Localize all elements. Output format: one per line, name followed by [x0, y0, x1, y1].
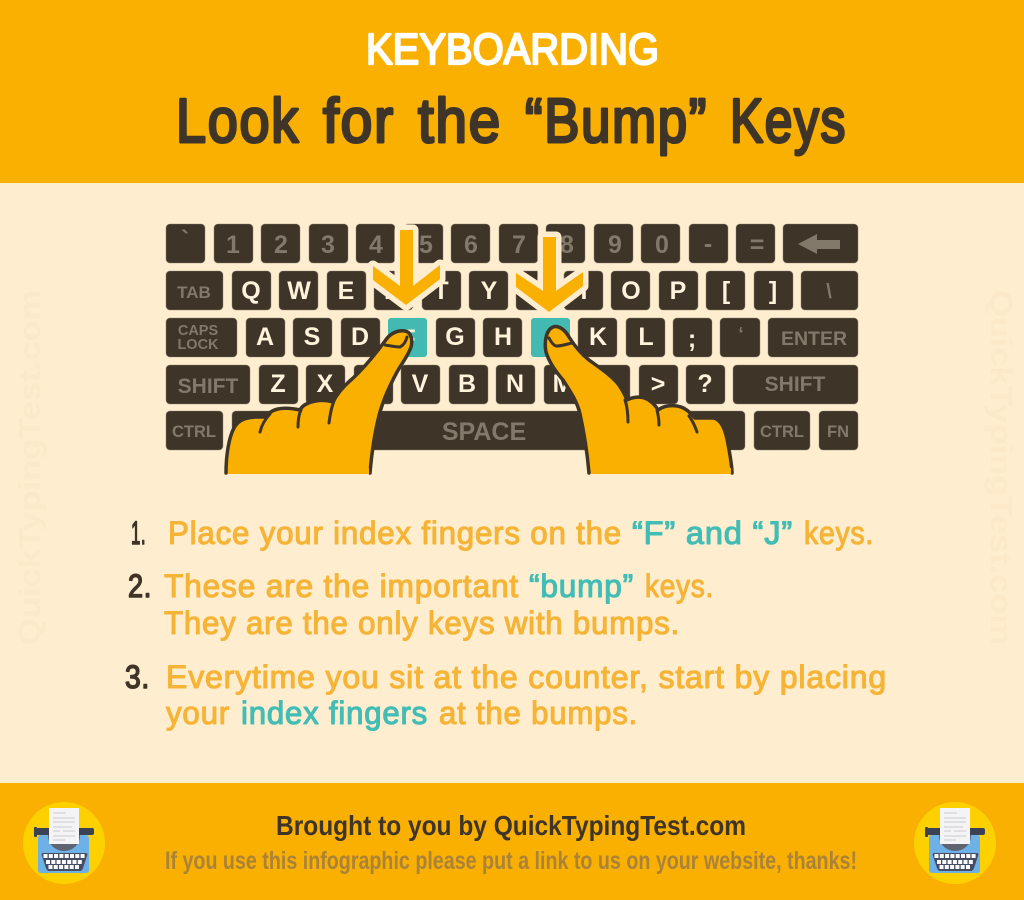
qwerty row: \ [826, 281, 832, 303]
bottom letter row: > [651, 370, 665, 398]
highlighted index fingers: index fingers [241, 695, 428, 731]
number row: 3 [321, 231, 335, 259]
heading: look for the bump keys: “Bump” [525, 87, 708, 156]
home row: LOCK [177, 337, 219, 353]
space bar row: SPACE [442, 418, 526, 446]
number row: 0 [655, 231, 669, 259]
space bar row [166, 411, 858, 450]
home row: H [494, 323, 512, 351]
qwerty row: TAB [177, 283, 211, 302]
space bar row: FN [827, 423, 849, 441]
number 3: 3. [125, 659, 150, 695]
qwerty row: I [581, 277, 587, 305]
qwerty row: E [338, 277, 354, 305]
icon: typewriter right [914, 802, 996, 884]
home row: ‘ [738, 324, 744, 344]
home row: K [589, 323, 607, 351]
home row: S [304, 323, 320, 351]
number 1: 1. [131, 515, 146, 551]
bottom letter row: X [317, 370, 334, 398]
footer credit: Brought to you by QuickTypingTest.com [276, 810, 746, 841]
qwerty row: U [527, 277, 545, 305]
title: keyboarding: KEYBOARDING [366, 25, 659, 74]
home row: ; [688, 325, 696, 353]
bottom letter row: ? [697, 370, 713, 398]
footer banner [0, 783, 1024, 900]
heading: look for the bump keys: for [323, 87, 395, 156]
heading: look for the bump keys: the [418, 87, 502, 156]
step 2 [128, 568, 714, 641]
qwerty row: P [670, 277, 686, 305]
icon: left arrow pointing at F key [373, 230, 440, 305]
space bar row: CTRL [760, 423, 804, 441]
qwerty row: ] [769, 277, 777, 305]
bottom letter row: B [458, 370, 476, 398]
bottom letter row [166, 365, 858, 404]
step 2 text end: keys. [645, 568, 714, 604]
space bar row: CTRL [172, 423, 216, 441]
bump key J [531, 318, 570, 357]
number row: 5 [419, 231, 433, 259]
number row: 8 [560, 231, 574, 259]
bottom letter row: SHIFT [765, 373, 825, 396]
home row: L [638, 323, 654, 351]
step 2 text: These are the important [164, 568, 519, 604]
number row: 1 [226, 231, 240, 259]
bottom letter row: N [506, 370, 524, 398]
home row: F [400, 325, 416, 353]
highlighted F and J: “F” and “J” [632, 515, 793, 551]
qwerty row [166, 271, 858, 310]
right hand [545, 327, 732, 474]
number row: 9 [608, 231, 622, 259]
heading: look for the bump keys: Look [176, 87, 300, 156]
qwerty row: O [621, 277, 641, 305]
qwerty row: [ [722, 277, 731, 305]
bottom letter row: M [553, 370, 573, 398]
step 1 [131, 515, 874, 551]
number 2: 2. [128, 568, 152, 604]
number row: ` [181, 226, 189, 254]
step 3 first line: Everytime you sit at the counter, start by placing [166, 659, 887, 695]
bottom letter row: V [412, 370, 429, 398]
heading: look for the bump keys: Keys [730, 87, 847, 156]
watermark right: QuickTypingTest.com [984, 290, 1019, 645]
number row: 4 [369, 231, 383, 259]
step 3 [125, 659, 887, 731]
highlighted bump: “bump” [529, 568, 634, 604]
home row: G [445, 323, 465, 351]
step 2 second line: They are the only keys with bumps. [164, 605, 680, 641]
step 1 text: Place your index fingers on the [168, 515, 622, 551]
home row: ENTER [781, 328, 847, 350]
bump key F [388, 318, 427, 357]
icon: right arrow pointing at J key [516, 237, 583, 312]
home row: J [543, 325, 557, 353]
qwerty row: R [384, 277, 402, 305]
keyboard illustration [166, 224, 858, 450]
step 3 your: your [166, 695, 230, 731]
step 3 text end: at the bumps. [439, 695, 638, 731]
icon: backspace arrow [798, 234, 840, 254]
header banner [0, 0, 1024, 183]
home row: CAPS [178, 323, 218, 339]
heading: look for the bump keys [176, 87, 847, 156]
qwerty row: Q [241, 277, 261, 305]
bottom letter row: Z [270, 370, 286, 398]
number row: = [750, 231, 764, 259]
number row: 2 [274, 231, 288, 259]
home row: D [351, 323, 369, 351]
home row [166, 318, 858, 357]
qwerty row: W [287, 277, 311, 305]
number row: - [704, 230, 712, 258]
qwerty row: T [433, 277, 449, 305]
step 1 text end: keys. [804, 515, 874, 551]
number row [166, 224, 858, 263]
number row: 6 [464, 231, 478, 259]
icon: typewriter left [23, 802, 105, 884]
bottom letter row: SHIFT [178, 375, 238, 398]
footer note: If you use this infographic please put a link to us on your website, thanks! [165, 847, 857, 875]
number row: 7 [512, 231, 526, 259]
home row: A [256, 323, 274, 351]
watermark left: QuickTypingTest.com [12, 290, 47, 645]
qwerty row: Y [481, 277, 498, 305]
left hand [226, 331, 412, 474]
